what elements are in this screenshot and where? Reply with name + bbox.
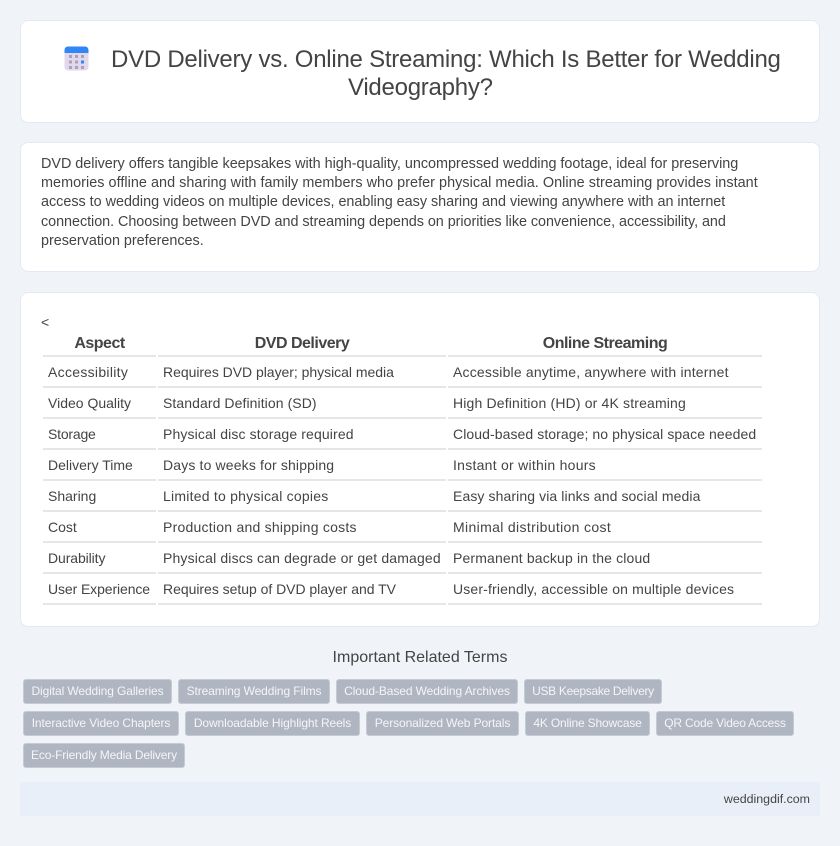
comparison table: Durability bbox=[48, 550, 105, 566]
comparison table: High Definition (HD) or 4K streaming bbox=[453, 394, 686, 410]
comparison table: Delivery Time bbox=[48, 456, 133, 472]
comparison table: Accessible anytime, anywhere with internet bbox=[453, 364, 729, 380]
comparison table: User-friendly, accessible on multiple devices bbox=[453, 580, 734, 596]
comparison table: Limited to physical copies bbox=[163, 488, 329, 504]
title bbox=[111, 46, 781, 101]
comparison table: Online Streaming bbox=[543, 334, 667, 352]
related terms tags: QR Code Video Access bbox=[664, 716, 786, 730]
intro paragraph: connection. Choosing between DVD and streaming depends on priorities like convenience, accessibility, and bbox=[41, 214, 726, 230]
related terms tags: Downloadable Highlight Reels bbox=[194, 716, 351, 730]
title: Videography? bbox=[348, 74, 493, 101]
footer source text: weddingdif.com bbox=[724, 792, 810, 806]
related terms tags: 4K Online Showcase bbox=[533, 716, 642, 730]
related terms tags: Digital Wedding Galleries bbox=[31, 684, 164, 698]
intro paragraph: DVD delivery offers tangible keepsakes with high-quality, uncompressed wedding footage, ideal for preserving bbox=[41, 156, 738, 172]
comparison table: Minimal distribution cost bbox=[453, 518, 611, 534]
related terms tags: Interactive Video Chapters bbox=[32, 716, 170, 730]
comparison table: Cost bbox=[48, 518, 77, 534]
intro paragraph: access to wedding videos on multiple devices, enabling easy sharing and viewing anywhere with an internet bbox=[41, 194, 725, 210]
comparison table: Standard Definition (SD) bbox=[163, 394, 317, 410]
related terms tags: Eco-Friendly Media Delivery bbox=[31, 748, 177, 762]
comparison table: Days to weeks for shipping bbox=[163, 456, 334, 472]
comparison table: User Experience bbox=[48, 580, 150, 596]
stray character: < bbox=[41, 314, 49, 330]
comparison table: Requires setup of DVD player and TV bbox=[163, 580, 396, 596]
icon: calendar bbox=[64, 46, 88, 70]
intro paragraph bbox=[41, 156, 758, 249]
comparison table: Sharing bbox=[48, 488, 96, 504]
comparison table: Video Quality bbox=[48, 394, 131, 410]
panel: intro text bbox=[20, 142, 820, 272]
comparison table: Accessibility bbox=[48, 364, 128, 380]
comparison table bbox=[43, 334, 762, 605]
related terms tags: Personalized Web Portals bbox=[375, 716, 510, 730]
comparison table: Storage bbox=[48, 426, 96, 442]
comparison table: Aspect bbox=[74, 334, 125, 352]
panel: comparison table bbox=[20, 292, 820, 627]
comparison table: Cloud-based storage; no physical space needed bbox=[453, 426, 756, 442]
comparison table: Permanent backup in the cloud bbox=[453, 550, 650, 566]
related terms tags bbox=[23, 679, 794, 768]
related terms tags: USB Keepsake Delivery bbox=[532, 684, 654, 698]
comparison table: Easy sharing via links and social media bbox=[453, 488, 700, 504]
heading: related terms: Important Related Terms bbox=[333, 649, 507, 666]
intro paragraph: memories offline and sharing with family members who prefer physical media. Online streaming provides instant bbox=[41, 175, 758, 191]
related terms tags: Streaming Wedding Films bbox=[187, 684, 321, 698]
comparison table: Physical discs can degrade or get damaged bbox=[163, 550, 441, 566]
title card bbox=[20, 20, 820, 123]
comparison table: Instant or within hours bbox=[453, 456, 596, 472]
intro paragraph: preservation preferences. bbox=[41, 233, 204, 249]
related terms tags: Cloud-Based Wedding Archives bbox=[344, 684, 510, 698]
title: DVD Delivery vs. Online Streaming: Which Is Better for Wedding bbox=[111, 46, 781, 73]
comparison table: Physical disc storage required bbox=[163, 426, 354, 442]
footer bar bbox=[20, 782, 820, 816]
comparison table: Production and shipping costs bbox=[163, 518, 357, 534]
comparison table: DVD Delivery bbox=[255, 334, 349, 352]
comparison table: Requires DVD player; physical media bbox=[163, 364, 394, 380]
